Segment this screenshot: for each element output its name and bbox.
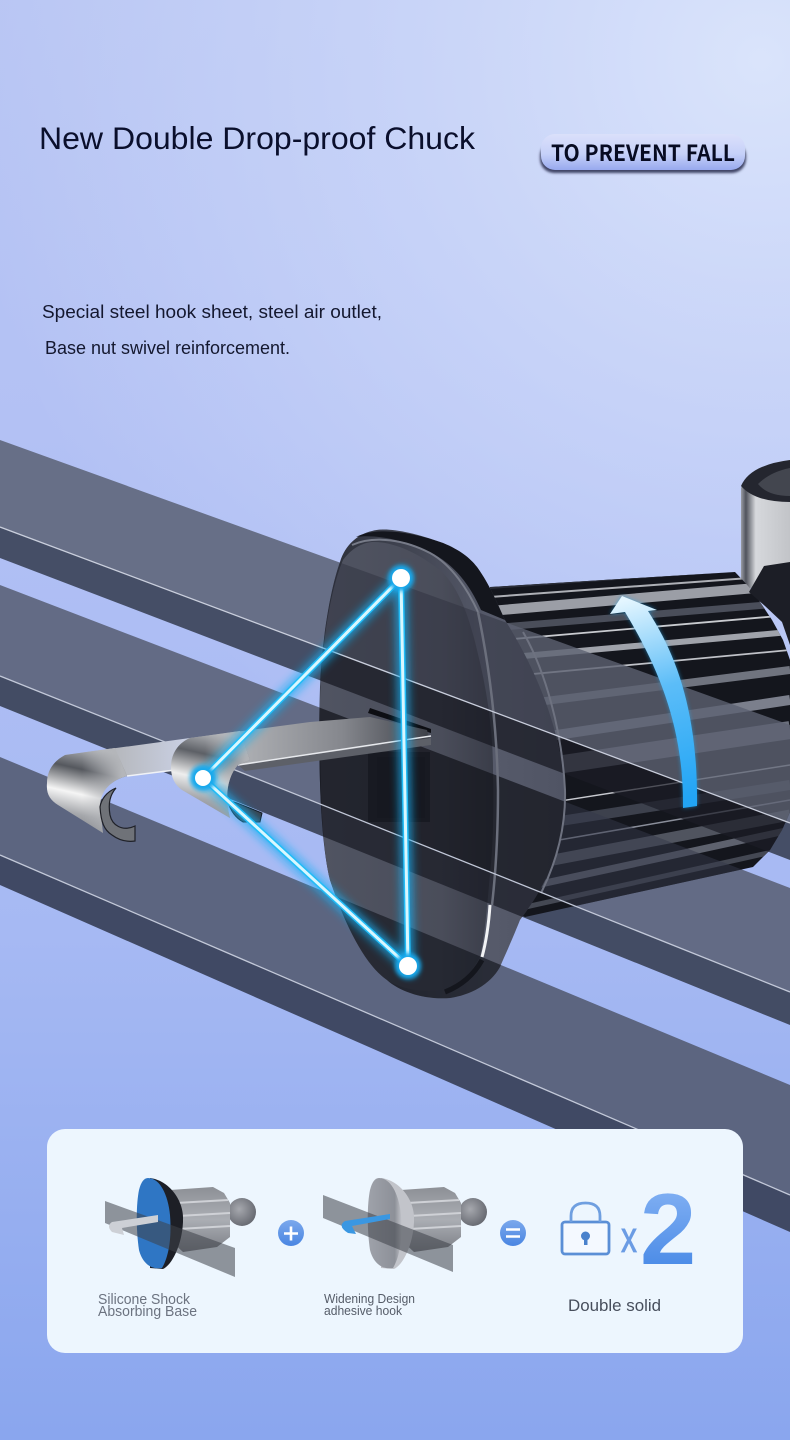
description text: Special steel hook sheet, steel air outlet, [42,301,382,322]
caption: silicone base: Absorbing Base [98,1304,197,1320]
bottom panel [47,1129,743,1353]
air vent rails [0,440,790,1232]
description text: Base nut swivel reinforcement. [45,337,290,358]
translucent rails over plate [319,562,564,998]
icon: padlock [562,1203,609,1254]
steel hook: front [171,717,431,822]
icon: plus [278,1220,304,1246]
chuck barrel with ribs [490,572,790,917]
icon: equals [500,1220,526,1246]
caption: silicone base: Silicone Shock [98,1292,191,1308]
steel hook: rear [47,738,190,841]
joint knuckle [749,562,790,645]
caption: silicone base [98,1292,197,1320]
diagram: widening design adhesive hook [323,1178,487,1272]
chuck collar and plate [319,530,566,998]
caption: adhesive hook [324,1292,415,1318]
diagram: silicone shock absorbing base [105,1178,256,1277]
badge: to prevent fall: TO PREVENT FALL [551,136,735,168]
triangle support diagram [190,565,421,979]
caption: double solid: Double solid [568,1296,661,1315]
caption: adhesive hook: adhesive hook [324,1304,403,1318]
description text [42,301,382,358]
caption: adhesive hook: Widening Design [324,1292,415,1306]
rim highlights [356,531,505,620]
multiplier x2: x [621,1213,637,1262]
rotation arrow [610,596,697,808]
title: New Double Drop-proof Chuck [39,120,475,156]
ball joint head [741,460,790,600]
vent highlight lines [0,527,790,992]
multiplier x2: 2 [640,1174,696,1286]
